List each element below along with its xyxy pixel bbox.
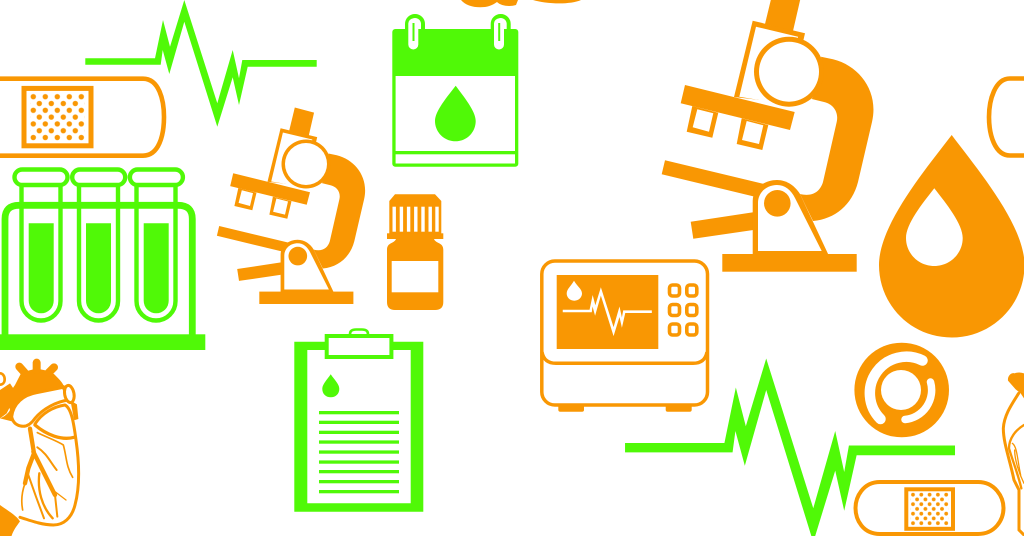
bandage bottom	[856, 482, 1004, 534]
heartbeat line bottom	[625, 358, 955, 536]
bandage left	[0, 79, 164, 156]
blood monitor device	[542, 261, 708, 412]
blood cell ring	[854, 343, 949, 437]
calendar with blood drop	[392, 16, 518, 167]
heart fragment top centre	[461, 0, 581, 7]
medicine bottle	[387, 194, 443, 310]
bandage right top	[989, 78, 1024, 156]
small microscope	[217, 108, 365, 304]
test tubes in rack	[0, 170, 205, 350]
big microscope	[662, 0, 873, 272]
big blood drop	[879, 135, 1024, 338]
heartbeat line top	[85, 0, 317, 127]
anatomical heart right	[1003, 372, 1024, 535]
anatomical heart left	[0, 363, 79, 536]
clipboard with blood report	[294, 330, 423, 512]
